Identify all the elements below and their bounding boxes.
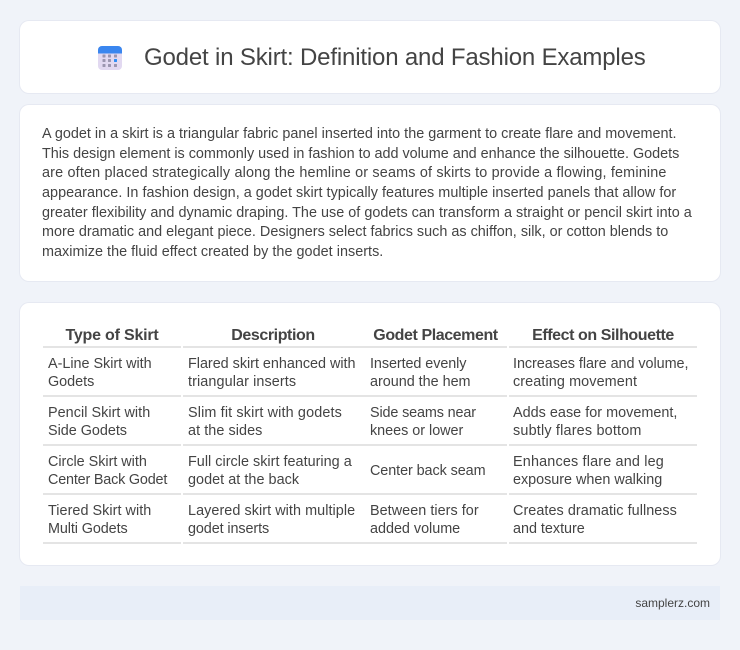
row: Circle: godet at the back (188, 472, 299, 488)
row: Pencil: Slim fit skirt with godets (188, 405, 342, 421)
row: A-Line: triangular inserts (188, 374, 296, 390)
row: Circle (48, 454, 664, 488)
description text: A godet in a skirt is a triangular fabric panel inserted into the garment to create flare and movement. (42, 126, 677, 142)
title: Godet in Skirt: Definition and Fashion Examples (144, 44, 646, 71)
row: Pencil (48, 405, 677, 439)
row: A-Line: Increases flare and volume, (513, 356, 688, 372)
row: A-Line: A-Line Skirt with (48, 356, 152, 372)
row: A-Line: Inserted evenly (370, 356, 466, 372)
row: Tiered: Layered skirt with multiple (188, 503, 355, 519)
footer source text: samplerz.com (635, 596, 710, 610)
row: Tiered: godet inserts (188, 521, 269, 537)
row: Pencil: Adds ease for movement, (513, 405, 677, 421)
row: Circle: Circle Skirt with (48, 454, 147, 470)
description text: appearance. In fashion design, a godet skirt typically features multiple inserted panels that allow for (42, 185, 676, 201)
table header (65, 327, 674, 344)
row: Circle: exposure when walking (513, 472, 662, 488)
description text: This design element is commonly used in fashion to add volume and enhance the silhouette. Godets (42, 146, 679, 162)
table header: Effect on Silhouette (532, 327, 674, 344)
description panel (20, 105, 720, 281)
row: Tiered: Creates dramatic fullness (513, 503, 677, 519)
description text (42, 126, 692, 260)
row: A-Line (48, 356, 688, 390)
row: Circle: Center back seam (370, 463, 486, 479)
footer bar (20, 586, 720, 620)
description text: maximize the fluid effect created by the godet inserts. (42, 244, 383, 260)
row: Circle: Enhances flare and leg (513, 454, 664, 470)
row: Tiered: Tiered Skirt with (48, 503, 151, 519)
row: Pencil: Side Godets (48, 423, 127, 439)
table header: Description (231, 327, 315, 344)
row: Tiered: Multi Godets (48, 521, 128, 537)
table header: Godet Placement (373, 327, 498, 344)
row: Tiered (48, 503, 677, 537)
row: Tiered: Between tiers for (370, 503, 479, 519)
description text: more dramatic and elegant piece. Designers select fabrics such as chiffon, silk, or cotton blends to (42, 224, 668, 240)
table (43, 327, 697, 544)
description text: greater flexibility and dynamic draping. The use of godets can transform a straight or pencil skirt into a (42, 205, 692, 221)
row: Pencil: Pencil Skirt with (48, 405, 150, 421)
row: Tiered: and texture (513, 521, 585, 537)
row: Pencil: at the sides (188, 423, 262, 439)
header panel (20, 21, 720, 93)
row: A-Line: creating movement (513, 374, 637, 390)
row: Pencil: Side seams near (370, 405, 476, 421)
table header: Type of Skirt (65, 327, 159, 344)
row: Circle: Center Back Godet (48, 472, 167, 488)
row: A-Line: around the hem (370, 374, 471, 390)
row: A-Line: Flared skirt enhanced with (188, 356, 355, 372)
row: Pencil: subtly flares bottom (513, 423, 642, 439)
row: Pencil: knees or lower (370, 423, 463, 439)
icon: calendar (98, 46, 122, 70)
row: Tiered: added volume (370, 521, 460, 537)
table panel (20, 303, 720, 565)
description text: are often placed strategically along the hemline or seams of skirts to provide a flowing, feminine (42, 165, 667, 181)
row: A-Line: Godets (48, 374, 94, 390)
row: Circle: Full circle skirt featuring a (188, 454, 352, 470)
